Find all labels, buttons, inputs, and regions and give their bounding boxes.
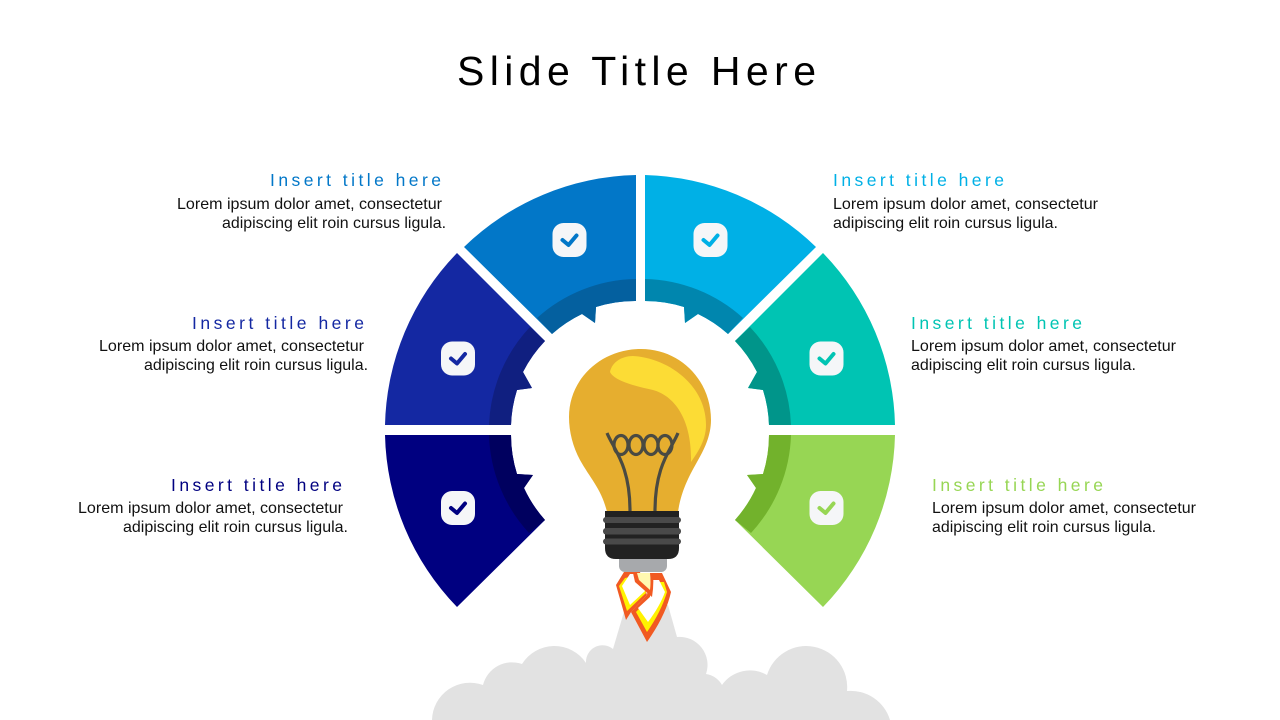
text block: top right: Insert title here [833, 170, 1004, 190]
text block: middle right: Lorem ipsum dolor amet, consectetur [911, 338, 1176, 355]
smoke cloud [432, 605, 890, 720]
text block: bottom right: Lorem ipsum dolor amet, consectetur [932, 500, 1196, 517]
text block: bottom left: Insert title here [171, 475, 342, 495]
icon: check bottom right [810, 491, 844, 525]
text block: bottom right: Insert title here [932, 475, 1103, 495]
text block: bottom right [932, 475, 1196, 536]
text block: top right [833, 170, 1098, 232]
bulb glass [569, 349, 711, 512]
left half-ring segments [385, 175, 636, 607]
text block: top right: Lorem ipsum dolor amet, consectetur [833, 196, 1098, 213]
text block: middle left: Insert title here [192, 313, 364, 333]
right half-ring segments [645, 175, 895, 607]
segment: bottom right [735, 435, 895, 607]
icon: check bottom left [441, 491, 475, 525]
text block: middle left: adipiscing elit roin cursus ligula. [144, 357, 368, 374]
filament [607, 433, 678, 511]
segment: middle right [735, 253, 895, 425]
text block: middle left [99, 313, 368, 374]
text block: top left: Insert title here [270, 170, 441, 190]
title: Slide Title Here [457, 48, 816, 94]
text block: bottom left: adipiscing elit roin cursus ligula. [123, 519, 348, 536]
text block: bottom left [78, 475, 348, 536]
text block: top right: adipiscing elit roin cursus ligula. [833, 215, 1058, 232]
icon: check middle left [441, 342, 475, 376]
icon: check top right [694, 223, 728, 257]
icon: check top left [552, 223, 586, 257]
text block: top left [177, 170, 446, 232]
text block: bottom left: Lorem ipsum dolor amet, consectetur [78, 500, 343, 517]
segment: bottom left [385, 435, 545, 607]
segment: middle left [385, 253, 545, 425]
text block: middle right: adipiscing elit roin cursus ligula. [911, 357, 1136, 374]
text block: middle right [911, 313, 1176, 374]
text block: middle left: Lorem ipsum dolor amet, consectetur [99, 338, 364, 355]
text block: top left: adipiscing elit roin cursus ligula. [222, 215, 446, 232]
segment: top right [645, 175, 816, 334]
icon: light bulb [569, 349, 711, 572]
segment: top left [464, 175, 636, 334]
socket [603, 511, 681, 572]
text block: middle right: Insert title here [911, 313, 1082, 333]
text block: top left: Lorem ipsum dolor amet, consectetur [177, 196, 442, 213]
bulb highlight [610, 356, 706, 462]
icon: check middle right [810, 342, 844, 376]
icon: rocket flames [616, 572, 671, 642]
text block: bottom right: adipiscing elit roin cursus ligula. [932, 519, 1156, 536]
